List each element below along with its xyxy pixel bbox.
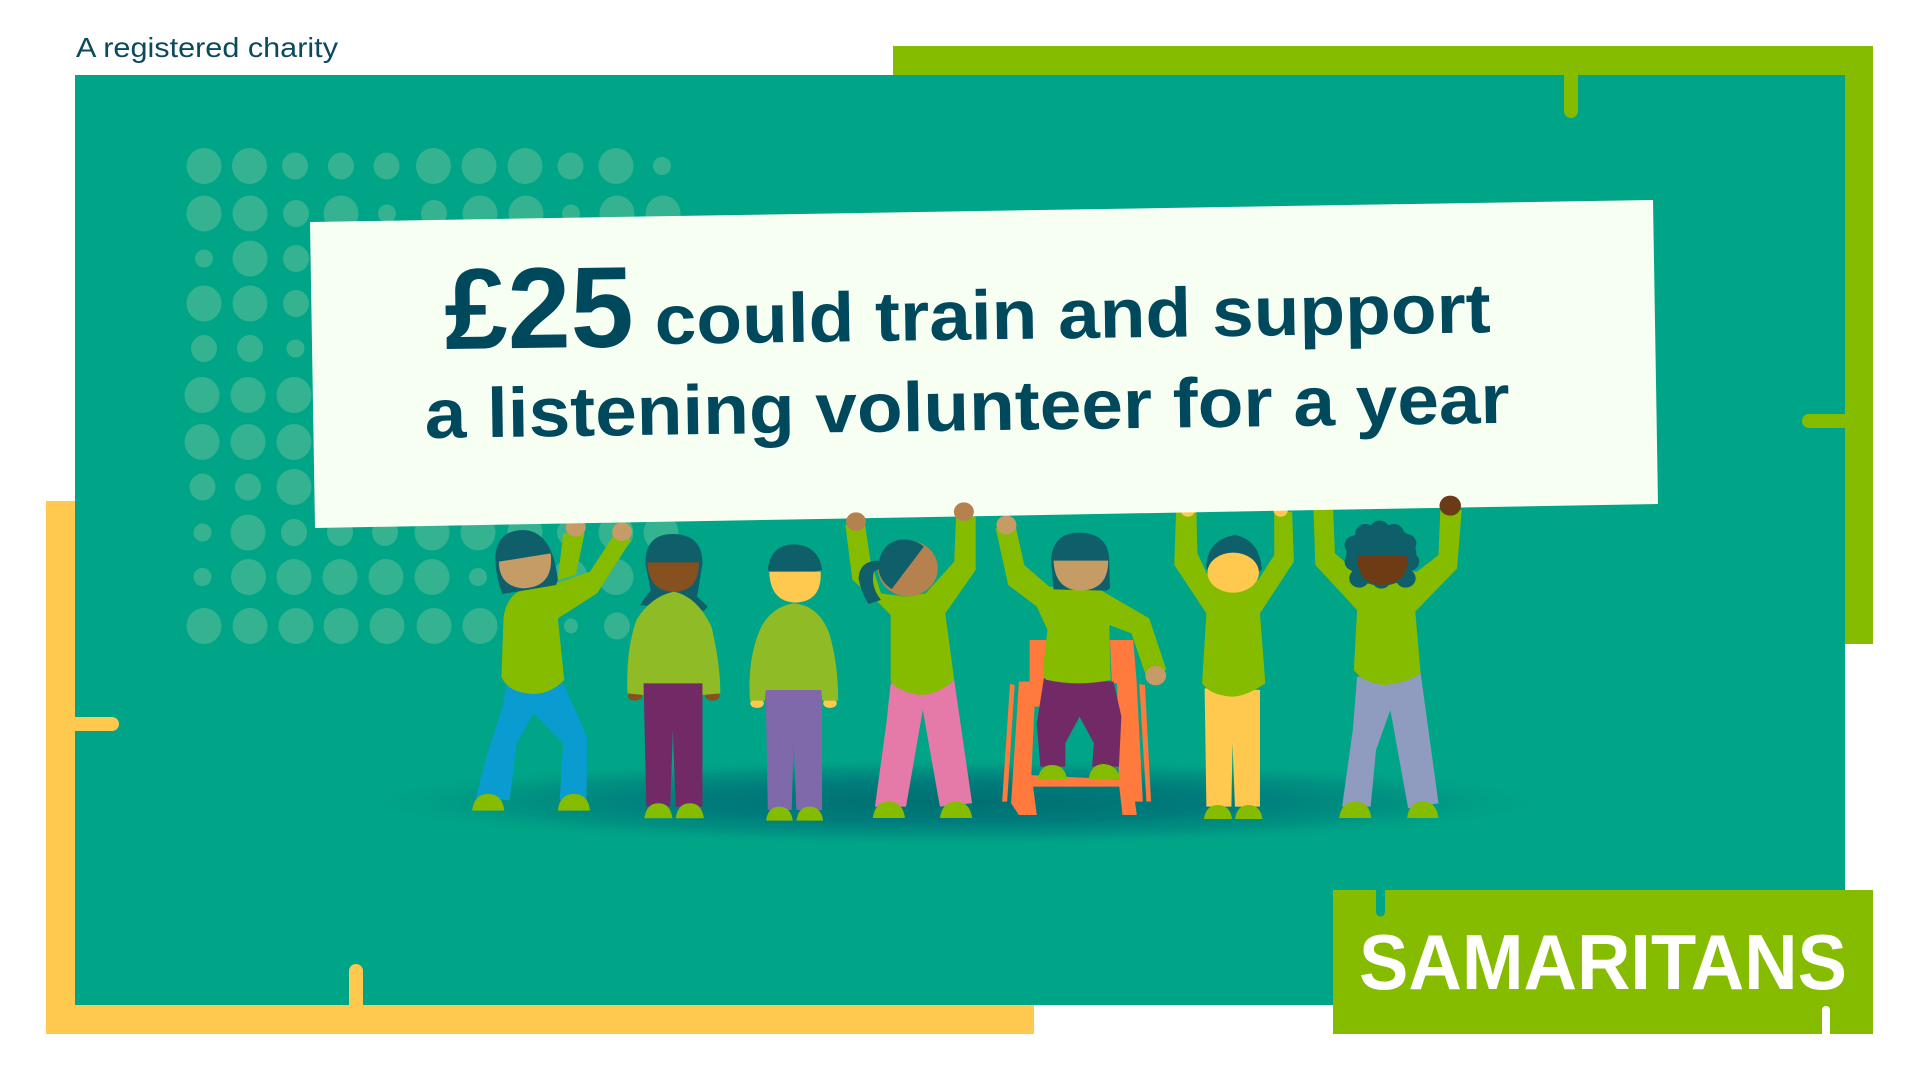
logo background <box>1333 890 1873 1034</box>
person 3 <box>749 544 838 821</box>
headline line 2: a listening volunteer for a year <box>424 360 1510 453</box>
logo block <box>1333 890 1873 1034</box>
headline line 1: could train and support <box>654 269 1491 359</box>
logo tick white <box>1822 1006 1830 1034</box>
person 2 <box>627 534 720 818</box>
banner <box>310 200 1658 528</box>
logo tick teal <box>1376 890 1385 916</box>
person 1 <box>472 518 631 811</box>
person 7 <box>1314 510 1462 818</box>
lime tick top <box>1564 75 1578 118</box>
group of people, right three <box>996 503 1462 819</box>
banner sheet <box>310 200 1658 528</box>
person 6 <box>1174 503 1294 819</box>
samaritans wordmark: SAMARITANS <box>1359 918 1847 1006</box>
yellow corner frame <box>46 501 1034 1034</box>
lime corner frame <box>893 46 1873 644</box>
group of people, left four <box>472 517 976 821</box>
yellow tick left <box>75 717 119 731</box>
ground shadow <box>355 758 1555 846</box>
amount: £25 <box>444 243 634 374</box>
person 4 <box>845 517 976 818</box>
hands gripping the banner <box>612 496 1461 541</box>
teal main panel <box>75 75 1845 1005</box>
registered charity label: A registered charity <box>76 32 338 63</box>
yellow tick bottom <box>349 964 363 1005</box>
lime tick right <box>1802 414 1845 428</box>
person 5 in wheelchair <box>996 516 1166 815</box>
halftone dot pattern <box>184 148 680 644</box>
